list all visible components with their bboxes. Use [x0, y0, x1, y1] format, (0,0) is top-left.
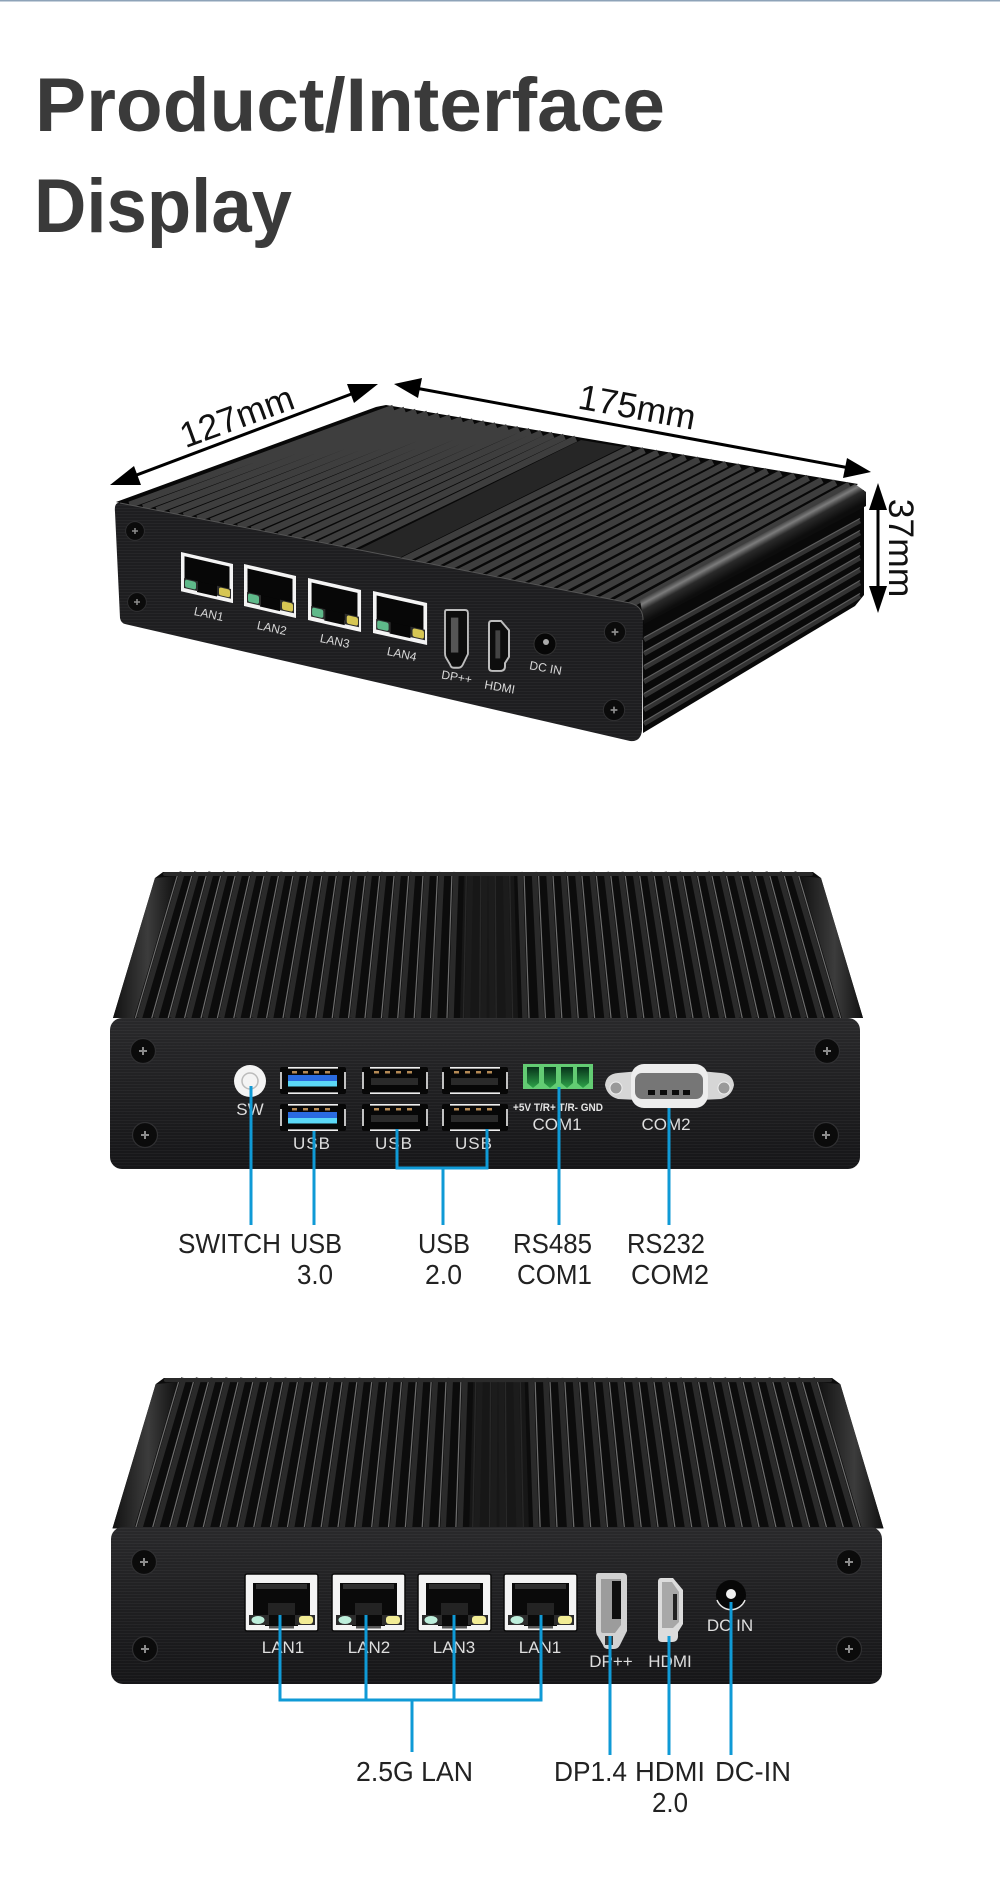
- product view: isometric with dimensions: [110, 377, 921, 741]
- DC jack: [707, 1580, 753, 1635]
- HDMI port: [489, 621, 509, 671]
- other port labels: [440, 658, 563, 697]
- HDMI port: [648, 1578, 692, 1671]
- other port labels: DC IN: [528, 658, 563, 678]
- DC jack: DC IN: [707, 1616, 753, 1635]
- USB 2.0 ports, left column: [362, 1067, 428, 1153]
- callout labels: COM1: [517, 1259, 592, 1290]
- callout labels: USB: [418, 1228, 470, 1259]
- USB 2.0 ports, right column: USB: [455, 1134, 493, 1153]
- USB 2.0 ports, left column: USB: [375, 1134, 413, 1153]
- front panel: [115, 503, 643, 741]
- other port labels: HDMI: [483, 678, 516, 697]
- callout lines: [251, 1086, 669, 1225]
- dimension arrow: 37mm: 37mm: [881, 499, 921, 597]
- top face with heat-sink fins: [116, 405, 858, 640]
- callout labels: DC-IN: [715, 1756, 791, 1787]
- callout labels: 2.0: [425, 1259, 462, 1290]
- front panel screws: [132, 1550, 862, 1662]
- front panel screws: [126, 522, 626, 721]
- 2.5G LAN ports: LAN1: [262, 1638, 304, 1657]
- other port labels: DP++: [440, 668, 473, 687]
- callout labels: COM2: [631, 1259, 709, 1290]
- LAN port labels: LAN1: [193, 604, 225, 624]
- title: Product/Interface: [35, 63, 665, 148]
- callout labels: SWITCH: [178, 1228, 281, 1259]
- COM2 serial connector: COM2: [641, 1115, 691, 1134]
- USB 3.0 ports: [280, 1067, 346, 1153]
- dimension arrow: 37mm: [869, 483, 921, 613]
- callout labels: 2.5G LAN: [356, 1756, 473, 1787]
- callout labels: [356, 1756, 791, 1818]
- callout labels: 3.0: [297, 1259, 333, 1290]
- 2.5G LAN ports: LAN2: [348, 1638, 390, 1657]
- callout labels: RS232: [627, 1228, 705, 1259]
- LAN port labels: [193, 604, 418, 664]
- 2.5G LAN ports: LAN3: [433, 1638, 475, 1657]
- COM1 terminal block: [513, 1064, 603, 1134]
- product view: rear interface panel: [110, 872, 863, 1290]
- power switch: SW: [236, 1100, 264, 1119]
- front panel: [111, 1527, 882, 1684]
- title: Display: [34, 164, 292, 249]
- enclosure fins: [113, 872, 863, 1018]
- LAN port labels: LAN3: [319, 631, 351, 651]
- DC jack: [534, 633, 556, 655]
- callout labels: 2.0: [652, 1787, 688, 1818]
- dimension arrow: 175mm: 175mm: [575, 377, 699, 438]
- LAN ports: [181, 552, 427, 645]
- callout labels: RS485: [513, 1228, 592, 1259]
- right side face with fins: [640, 484, 866, 733]
- 2.5G LAN ports: [245, 1574, 577, 1657]
- power switch: [234, 1065, 266, 1119]
- COM1 terminal block: COM1: [532, 1115, 582, 1134]
- COM2 serial connector: [605, 1064, 734, 1134]
- callout labels: DP1.4: [554, 1756, 627, 1787]
- dimension arrow: 175mm: [394, 377, 871, 478]
- enclosure fins: [112, 1378, 884, 1528]
- USB 3.0 ports: USB: [293, 1134, 331, 1153]
- LAN port labels: LAN2: [256, 618, 288, 638]
- dimension arrow: 127mm: [110, 378, 378, 485]
- callout labels: [178, 1228, 709, 1290]
- rear panel: [110, 1018, 860, 1169]
- DP port: [445, 610, 468, 668]
- HDMI port: HDMI: [648, 1652, 692, 1671]
- DP port: [589, 1573, 633, 1671]
- page top rule: [0, 0, 1000, 2]
- LAN port labels: LAN4: [386, 644, 418, 664]
- product view: front LAN panel: [111, 1378, 884, 1818]
- callout labels: HDMI: [635, 1756, 705, 1787]
- callout lines: [278, 1602, 731, 1755]
- rear panel screws: [130, 1038, 840, 1148]
- callout labels: USB: [290, 1228, 342, 1259]
- title: [34, 63, 665, 249]
- dimension arrow: 127mm: 127mm: [174, 378, 299, 456]
- COM1 terminal block: +5V T/R+ T/R- GND: [513, 1102, 603, 1114]
- 2.5G LAN ports: LAN1: [519, 1638, 561, 1657]
- DP port: DP++: [589, 1652, 633, 1671]
- USB 2.0 ports, right column: [442, 1067, 508, 1153]
